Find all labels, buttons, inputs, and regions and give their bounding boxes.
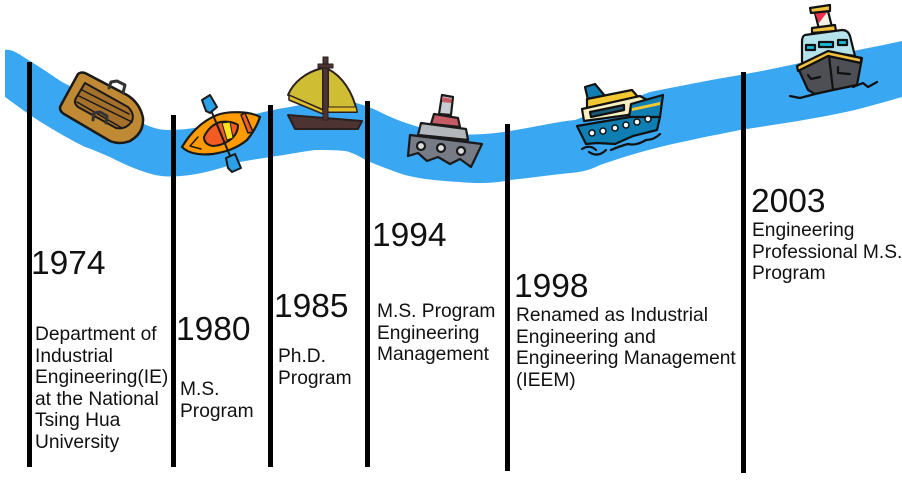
description 1985 bbox=[278, 346, 352, 388]
year 1974: 1974 bbox=[31, 245, 106, 282]
year 1980: 1980 bbox=[176, 311, 251, 348]
timeline pole 1998 bbox=[505, 124, 510, 471]
timeline pole 1985 bbox=[268, 105, 273, 467]
description 1974: Industrial bbox=[35, 346, 113, 366]
description 1980 bbox=[180, 379, 254, 422]
description 1998 bbox=[516, 305, 736, 390]
icon: sailboat bbox=[288, 57, 362, 129]
description 1994: Management bbox=[377, 344, 489, 365]
description 1985: Ph.D. bbox=[278, 346, 326, 367]
description 1974: Department of bbox=[35, 324, 157, 345]
year 2003: 2003 bbox=[751, 183, 826, 220]
description 1998: Engineering and bbox=[516, 326, 656, 348]
icon: kayak bbox=[182, 95, 260, 172]
description 2003: Engineering bbox=[752, 220, 854, 241]
description 1974: Engineering(IE) bbox=[35, 367, 168, 388]
description 1994: M.S. Program bbox=[377, 301, 495, 322]
icon: wooden raft bbox=[60, 72, 143, 143]
year 1998: 1998 bbox=[514, 268, 589, 305]
description 1974: at the National bbox=[35, 388, 159, 410]
description 1974: Tsing Hua bbox=[35, 410, 120, 431]
icon: cruise ship bbox=[577, 84, 663, 155]
river bbox=[5, 41, 902, 183]
icon: steam boat bbox=[408, 95, 482, 167]
description 1980: Program bbox=[180, 400, 254, 422]
description 1998: (IEEM) bbox=[516, 370, 576, 390]
description 1994 bbox=[377, 301, 495, 365]
icon: ferry ship bbox=[790, 5, 877, 98]
description 1994: Engineering bbox=[377, 322, 479, 344]
description 1974: University bbox=[35, 432, 119, 452]
year 1994: 1994 bbox=[372, 217, 447, 254]
description 1974 bbox=[35, 324, 168, 452]
description 1998: Engineering Management bbox=[516, 348, 736, 369]
description 2003 bbox=[752, 220, 902, 284]
description 1998: Renamed as Industrial bbox=[516, 305, 708, 326]
timeline pole 1994 bbox=[365, 101, 370, 467]
description 2003: Program bbox=[752, 263, 826, 284]
description 1980: M.S. bbox=[180, 379, 219, 400]
timeline pole 1980 bbox=[171, 115, 176, 467]
timeline pole 2003 bbox=[741, 72, 746, 473]
timeline pole 1974 bbox=[27, 62, 32, 467]
year 1985: 1985 bbox=[274, 288, 349, 325]
description 1985: Program bbox=[278, 368, 352, 388]
description 2003: Professional M.S. bbox=[752, 242, 902, 262]
